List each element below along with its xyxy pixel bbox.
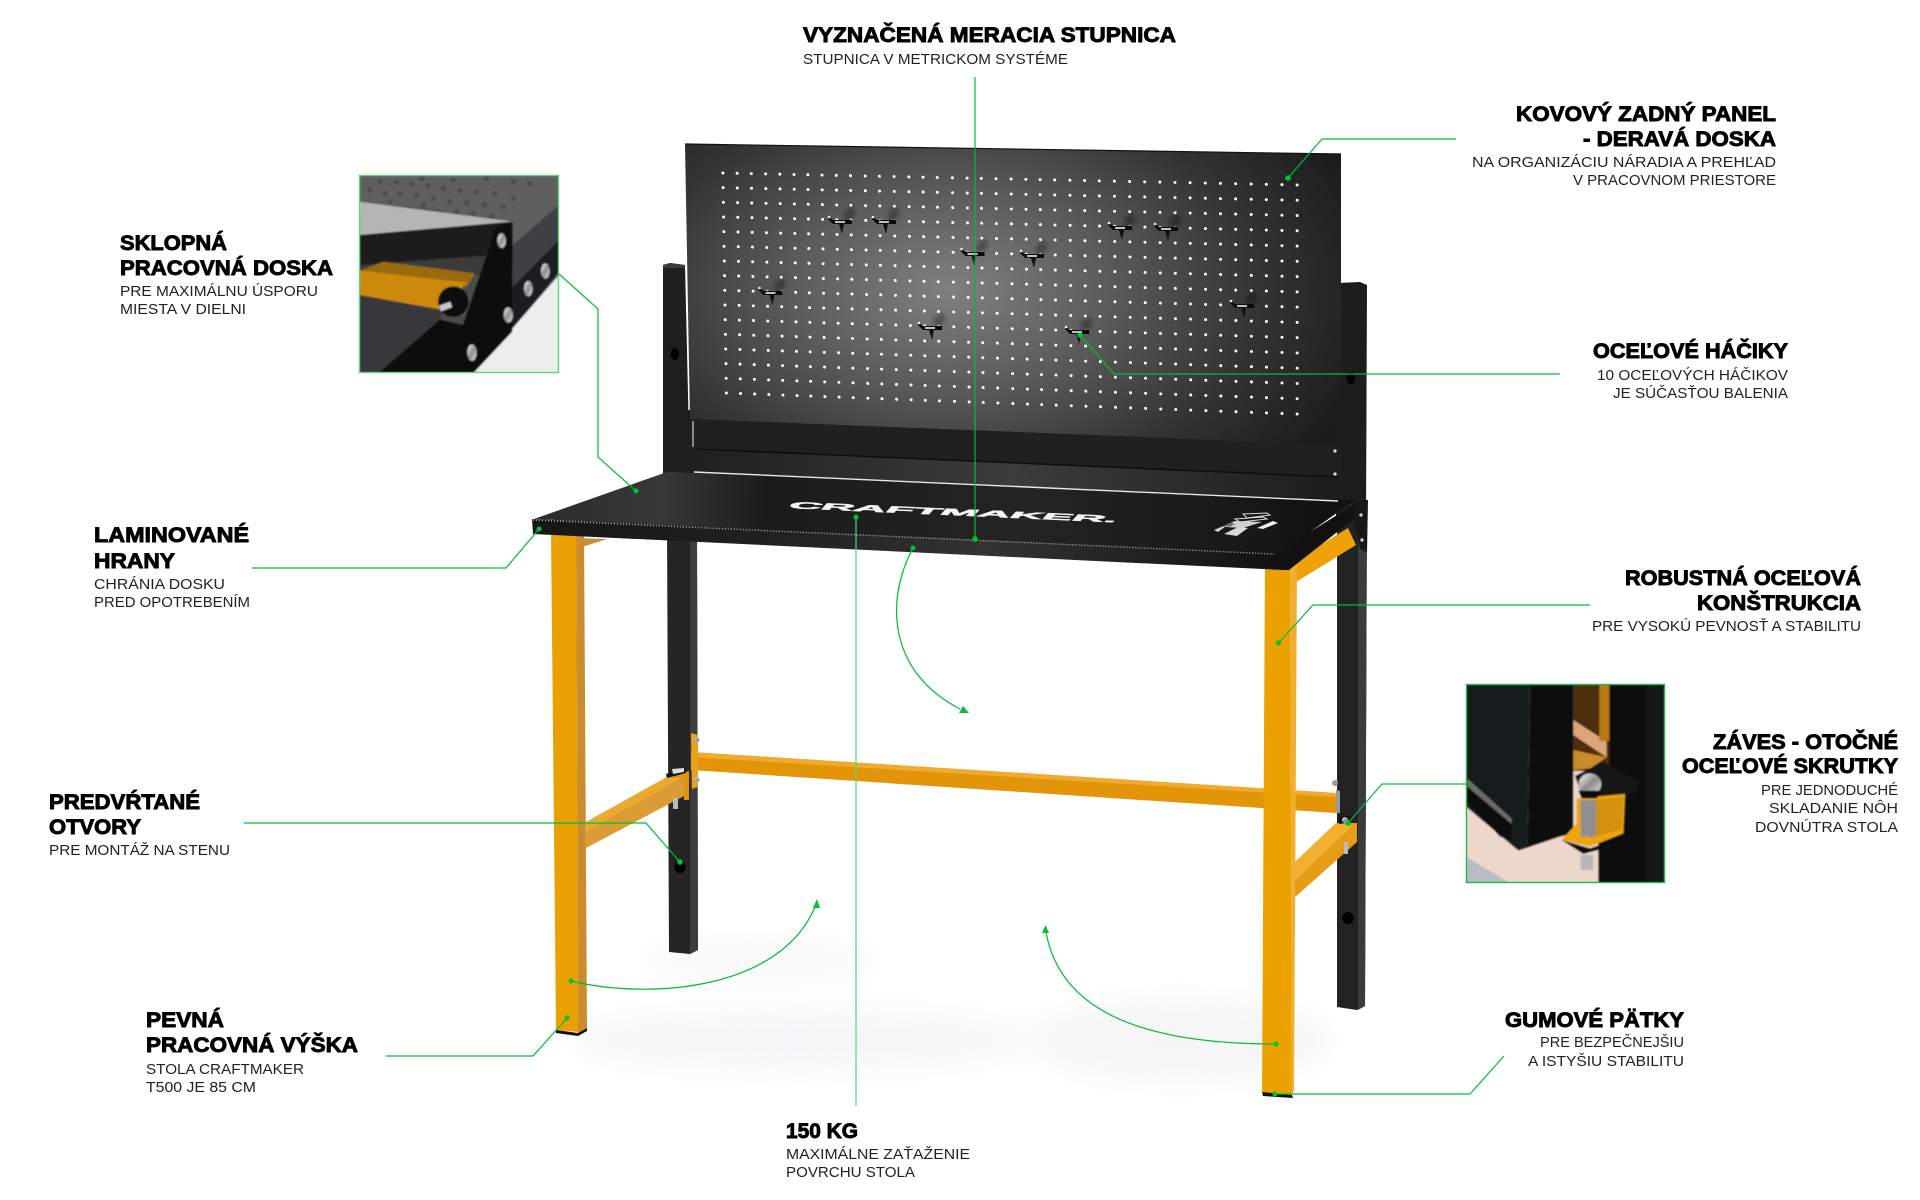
callout line: laminated edges <box>252 526 542 568</box>
label: fixed height <box>146 1009 358 1096</box>
back right post and leg <box>1336 282 1367 1010</box>
label: fixed height: PRACOVNÁ VÝŠKA <box>146 1033 358 1057</box>
label: folding top: PRACOVNÁ DOSKA <box>120 257 333 280</box>
label: rubber feet: GUMOVÉ PÄTKY <box>1505 1009 1684 1032</box>
label: folding top <box>120 232 333 318</box>
label: hinge screws: ZÁVES - OTOČNÉ <box>1713 730 1898 754</box>
label: folding top: SKLOPNÁ <box>120 232 227 255</box>
back left post and leg <box>663 263 698 954</box>
label: steel hooks: 10 OCEĽOVÝCH HÁČIKOV <box>1597 367 1788 384</box>
label: steel construction: PRE VYSOKÚ PEVNOSŤ A STABILITU <box>1592 618 1861 635</box>
label: rubber feet <box>1505 1009 1684 1070</box>
callout line: fixed height <box>386 1016 570 1056</box>
label: hinge screws: OCEĽOVÉ SKRUTKY <box>1682 755 1898 778</box>
floor shadows <box>570 944 1330 1082</box>
callout line: hinge screws <box>1345 784 1466 826</box>
label: metal back panel <box>1472 102 1776 189</box>
label: fixed height: STOLA CRAFTMAKER <box>146 1061 304 1078</box>
callout line: 150 kg load <box>854 514 858 1106</box>
label: folding top: MIESTA V DIELNI <box>120 301 246 318</box>
model mark on table <box>1214 513 1278 536</box>
front right leg and upper brace <box>1262 528 1356 1098</box>
label: steel construction: KONŠTRUKCIA <box>1697 591 1861 615</box>
label: laminated edges: LAMINOVANÉ <box>94 524 249 547</box>
label: steel construction <box>1592 567 1861 635</box>
label: steel hooks: OCEĽOVÉ HÁČIKY <box>1593 339 1788 363</box>
workbench <box>532 144 1368 1098</box>
label: 150 kg load <box>786 1120 970 1181</box>
callout line: hooks <box>1077 332 1560 374</box>
label: rubber feet: A ISTYŠIU STABILITU <box>1528 1053 1684 1070</box>
left side diagonal brace <box>576 538 689 848</box>
label: 150 kg load: POVRCHU STOLA <box>786 1164 915 1181</box>
callout line: pre-drilled holes <box>244 823 683 865</box>
fold arrow: table top <box>897 546 969 713</box>
label: measuring scale: STUPNICA V METRICKOM SYSTÉME <box>803 51 1068 68</box>
label: laminated edges: PRED OPOTREBENÍM <box>94 594 250 611</box>
label: rubber feet: PRE BEZPEČNEJŠIU <box>1540 1034 1684 1051</box>
label: pre-drilled holes: OTVORY <box>49 816 141 839</box>
brand text on table: CRAFTMAKER. <box>785 500 1122 525</box>
steel hooks <box>758 206 1258 344</box>
label: hinge screws: PRE JEDNODUCHÉ <box>1761 782 1898 799</box>
callout line: measuring scale <box>972 77 978 542</box>
label: fixed height: PEVNÁ <box>146 1009 224 1032</box>
callout line: steel construction <box>1276 605 1590 646</box>
fold arrow: left legs <box>568 899 820 989</box>
callout line: perforated panel <box>1285 139 1456 181</box>
label: steel hooks: JE SÚČASŤOU BALENIA <box>1613 385 1788 402</box>
label: hinge screws: SKLADANIE NÔH <box>1769 800 1898 817</box>
label: pre-drilled holes: PRE MONTÁŽ NA STENU <box>49 842 230 859</box>
label: fixed height: T500 JE 85 CM <box>146 1079 256 1096</box>
callout line: folding top <box>559 274 638 494</box>
callout line: rubber feet <box>1272 1056 1504 1096</box>
inset photo: folding work top <box>359 175 559 373</box>
label: pre-drilled holes: PREDVŔTANÉ <box>49 791 200 814</box>
label: laminated edges <box>94 524 250 611</box>
label: steel construction: ROBUSTNÁ OCEĽOVÁ <box>1625 567 1861 590</box>
label: pre-drilled holes <box>49 791 230 859</box>
label: hinge screws: DOVNÚTRA STOLA <box>1755 819 1898 836</box>
crossbar <box>691 752 1336 813</box>
label: 150 kg load: 150 KG <box>786 1120 858 1143</box>
label: measuring scale: VYZNAČENÁ MERACIA STUPNICA <box>803 23 1176 47</box>
label: measuring scale <box>803 23 1176 68</box>
pegboard holes <box>721 171 1299 416</box>
fold arrow: right legs <box>1042 925 1278 1046</box>
label: 150 kg load: MAXIMÁLNE ZAŤAŽENIE <box>786 1146 970 1163</box>
rear brackets <box>691 733 1340 813</box>
model mark on table: T500 <box>1222 522 1237 529</box>
front left leg <box>551 530 587 1036</box>
label: steel hooks <box>1593 339 1788 402</box>
pegboard back panel <box>685 144 1341 510</box>
inset photo: hinge screws <box>1466 684 1666 884</box>
label: laminated edges: CHRÁNIA DOSKU <box>94 576 225 593</box>
laminated table top <box>532 472 1368 570</box>
label: metal back panel: NA ORGANIZÁCIU NÁRADIA A PREHĽAD <box>1472 154 1776 171</box>
label: metal back panel: - DERAVÁ DOSKA <box>1583 128 1776 151</box>
label: hinge screws <box>1682 730 1898 836</box>
label: metal back panel: KOVOVÝ ZADNÝ PANEL <box>1516 102 1776 126</box>
label: laminated edges: HRANY <box>94 550 175 573</box>
right side diagonal brace <box>1294 815 1357 898</box>
label: folding top: PRE MAXIMÁLNU ÚSPORU <box>120 283 318 300</box>
label: metal back panel: V PRACOVNOM PRIESTORE <box>1573 172 1776 189</box>
